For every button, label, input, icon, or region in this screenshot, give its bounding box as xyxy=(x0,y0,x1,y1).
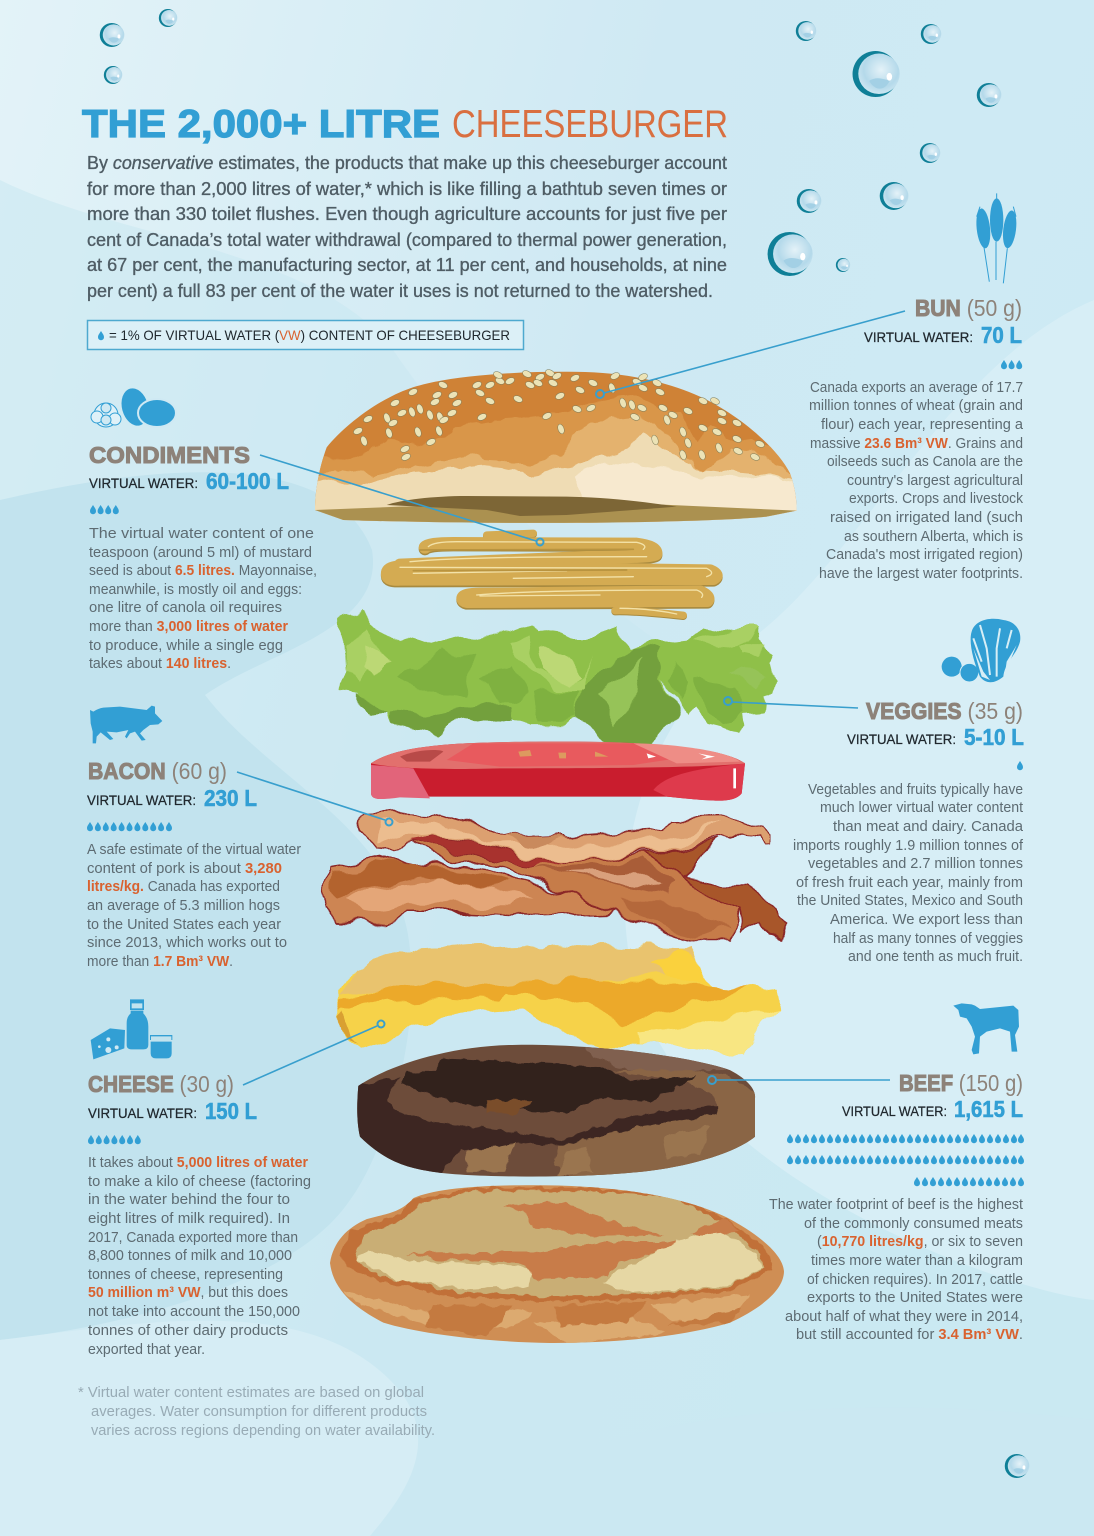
virtual water value: 60-100 L xyxy=(206,468,289,494)
text: bun: flour) each year, representing a xyxy=(821,416,1024,433)
panel: bun xyxy=(809,193,1024,582)
text: bacon: more than 1.7 Bm³ VW. xyxy=(87,953,233,970)
sesame seeds xyxy=(352,368,766,462)
text: cheese: 2017, Canada exported more than xyxy=(88,1229,298,1246)
text: bacon: content of pork is about 3,280 xyxy=(87,860,282,877)
intro text: at 67 per cent, the manufacturing sector, at 11 per cent, and households, at nine xyxy=(87,255,727,275)
beef patty xyxy=(357,1044,756,1177)
virtual water value xyxy=(842,1096,1023,1122)
panel: cheese xyxy=(88,999,311,1358)
footnote: varies across regions depending on water availability. xyxy=(91,1422,435,1439)
virtual water value: VIRTUAL WATER: xyxy=(842,1103,947,1119)
title: THE 2,000+ LITRE xyxy=(82,103,440,146)
drops: cheese xyxy=(88,1135,141,1144)
text: cheese: in the water behind the four to xyxy=(88,1191,290,1208)
icon: seeds and eggs xyxy=(91,385,176,429)
text: bun: oilseeds such as Canola are the xyxy=(827,453,1023,470)
text: condiments: The virtual water content of one xyxy=(89,525,314,542)
drops: veggies xyxy=(1017,761,1023,770)
text: beef: of the commonly consumed meats xyxy=(804,1215,1023,1232)
drops: beef xyxy=(787,1134,1024,1186)
icon: wheat xyxy=(975,193,1018,283)
text: veggies: Vegetables and fruits typically have xyxy=(808,781,1023,798)
text: condiments: teaspoon (around 5 ml) of mustard xyxy=(89,544,312,561)
text: veggies: America. We export less than xyxy=(830,911,1023,928)
heading: bun: BUN (50 g) xyxy=(915,295,1022,321)
text: bun: Canada's most irrigated region) xyxy=(826,546,1023,563)
heading: bacon: BACON (60 g) xyxy=(88,758,227,784)
text: condiments xyxy=(89,525,317,672)
virtual water value xyxy=(89,468,289,494)
mustard xyxy=(387,533,716,616)
virtual water value xyxy=(87,785,257,811)
text: cheese: tonnes of cheese, representing xyxy=(88,1266,283,1283)
bottom bun xyxy=(330,1185,784,1343)
drops: bacon xyxy=(87,822,172,831)
intro text xyxy=(87,153,727,301)
pointer: condiments xyxy=(260,455,544,546)
footnote xyxy=(78,1384,435,1439)
burger illustration xyxy=(300,360,807,1351)
text: condiments: takes about 140 litres. xyxy=(89,655,231,672)
text: condiments: meanwhile, is mostly oil and eggs: xyxy=(89,581,302,598)
text: bun xyxy=(809,379,1024,582)
tomato xyxy=(371,742,745,801)
text: condiments: more than 3,000 litres of water xyxy=(89,618,288,635)
text: veggies: half as many tonnes of veggies xyxy=(833,930,1023,947)
virtual water value: 1,615 L xyxy=(954,1096,1023,1122)
text: beef: but still accounted for 3.4 Bm³ VW. xyxy=(796,1326,1023,1343)
virtual water value: VIRTUAL WATER: xyxy=(87,792,196,808)
virtual water value: VIRTUAL WATER: xyxy=(89,475,198,491)
text: veggies: than meat and dairy. Canada xyxy=(833,818,1024,835)
icon: cow xyxy=(953,1003,1019,1054)
text: beef: of chicken requires). In 2017, cattle xyxy=(807,1271,1023,1288)
intro text: per cent) a full 83 per cent of the water it uses is not returned to the watershed. xyxy=(87,281,713,301)
text: beef: exports to the United States were xyxy=(807,1289,1023,1306)
virtual water value: VIRTUAL WATER: xyxy=(864,329,973,345)
pointer: veggies xyxy=(724,697,858,708)
top bun xyxy=(315,369,797,523)
virtual water value: 70 L xyxy=(981,322,1022,348)
icon: lettuce and tomatoes xyxy=(942,619,1020,682)
text: cheese: 50 million m³ VW, but this does xyxy=(88,1284,288,1301)
text: cheese: not take into account the 150,000 xyxy=(88,1303,300,1320)
virtual water value: 150 L xyxy=(205,1098,257,1124)
drops: condiments xyxy=(90,505,119,514)
legend xyxy=(88,320,524,350)
pointer: bacon xyxy=(237,772,392,826)
text: bacon: an average of 5.3 million hogs xyxy=(87,897,280,914)
footnote: averages. Water consumption for different products xyxy=(91,1403,427,1420)
text: bun: country's largest agricultural xyxy=(847,472,1023,489)
text: cheese: eight litres of milk required). In xyxy=(88,1210,290,1227)
intro text: cent of Canada’s total water withdrawal (compared to thermal power generation, xyxy=(87,230,727,250)
text: veggies: vegetables and 2.7 million tonnes xyxy=(808,855,1023,872)
text: condiments: one litre of canola oil requires xyxy=(89,599,282,616)
text: veggies: and one tenth as much fruit. xyxy=(848,948,1023,965)
heading: condiments: CONDIMENTS xyxy=(89,442,250,468)
footnote: * Virtual water content estimates are based on global xyxy=(78,1384,424,1401)
text: beef: (10,770 litres/kg, or six to seven xyxy=(817,1233,1023,1250)
text: bun: exports. Crops and livestock xyxy=(849,490,1023,507)
virtual water value xyxy=(847,724,1024,750)
lettuce xyxy=(340,612,777,747)
virtual water value xyxy=(88,1098,257,1124)
virtual water value: 230 L xyxy=(204,785,257,811)
text: cheese xyxy=(88,1154,311,1358)
text: cheese: It takes about 5,000 litres of water xyxy=(88,1154,308,1171)
pointer: bun xyxy=(596,311,905,398)
text: cheese: to make a kilo of cheese (factoring xyxy=(88,1173,311,1190)
legend: = 1% OF VIRTUAL WATER (VW) CONTENT OF CHEESEBURGER xyxy=(109,327,510,343)
text: beef: times more water than a kilogram xyxy=(811,1252,1023,1269)
pointer: cheese xyxy=(243,1020,384,1085)
text: condiments: seed is about 6.5 litres. Mayonnaise, xyxy=(89,562,317,579)
panel: condiments xyxy=(89,385,317,672)
text: cheese: tonnes of other dairy products xyxy=(88,1322,288,1339)
heading: veggies: VEGGIES (35 g) xyxy=(866,698,1023,724)
text: bun: Canada exports an average of 17.7 xyxy=(810,379,1023,396)
text: beef: The water footprint of beef is the highest xyxy=(769,1196,1024,1213)
virtual water value: VIRTUAL WATER: xyxy=(88,1105,197,1121)
text: bun: raised on irrigated land (such xyxy=(830,509,1023,526)
intro text: more than 330 toilet flushes. Even though agriculture accounts for just five per xyxy=(87,204,727,224)
text: bun: massive 23.6 Bm³ VW. Grains and xyxy=(810,435,1023,452)
intro text: By conservative estimates, the products that make up this cheeseburger account xyxy=(87,153,727,173)
bacon xyxy=(323,812,787,942)
icon: cheese, milk bottle and glass xyxy=(91,999,172,1059)
heading: cheese: CHEESE (30 g) xyxy=(88,1071,234,1097)
text: cheese: exported that year. xyxy=(88,1341,205,1358)
cheese xyxy=(337,944,783,1060)
text: bacon: to the United States each year xyxy=(87,916,281,933)
panel: veggies xyxy=(793,619,1024,965)
text: cheese: 8,800 tonnes of milk and 10,000 xyxy=(88,1247,292,1264)
drops: bun xyxy=(1001,360,1022,369)
text: bacon: litres/kg. Canada has exported xyxy=(87,878,280,895)
panel: bacon xyxy=(87,706,301,970)
pointer: beef xyxy=(708,1076,890,1084)
text: beef: about half of what they were in 2014, xyxy=(785,1308,1023,1325)
intro text: for more than 2,000 litres of water,* which is like filling a bathtub seven times or xyxy=(87,179,727,199)
text: bun: million tonnes of wheat (grain and xyxy=(809,397,1023,414)
text: bacon: since 2013, which works out to xyxy=(87,934,287,951)
text: bun: have the largest water footprints. xyxy=(819,565,1023,582)
text: veggies: of fresh fruit each year, mainly from xyxy=(796,874,1023,891)
text: condiments: to produce, while a single egg xyxy=(89,637,283,654)
virtual water value: VIRTUAL WATER: xyxy=(847,731,956,747)
text: veggies: much lower virtual water content xyxy=(820,799,1024,816)
virtual water value xyxy=(864,322,1022,348)
text: veggies: the United States, Mexico and South xyxy=(797,892,1023,909)
title: CHEESEBURGER xyxy=(452,103,728,146)
text: veggies xyxy=(793,781,1024,965)
text: veggies: imports roughly 1.9 million tonnes of xyxy=(793,837,1024,854)
text: beef xyxy=(769,1196,1024,1343)
heading: beef: BEEF (150 g) xyxy=(899,1070,1023,1096)
text: bacon xyxy=(87,841,301,970)
text: bun: as southern Alberta, which is xyxy=(844,528,1023,545)
icon: pig xyxy=(90,706,162,743)
panel: beef xyxy=(769,1003,1024,1343)
virtual water value: 5-10 L xyxy=(964,724,1024,750)
text: bacon: A safe estimate of the virtual water xyxy=(87,841,301,858)
